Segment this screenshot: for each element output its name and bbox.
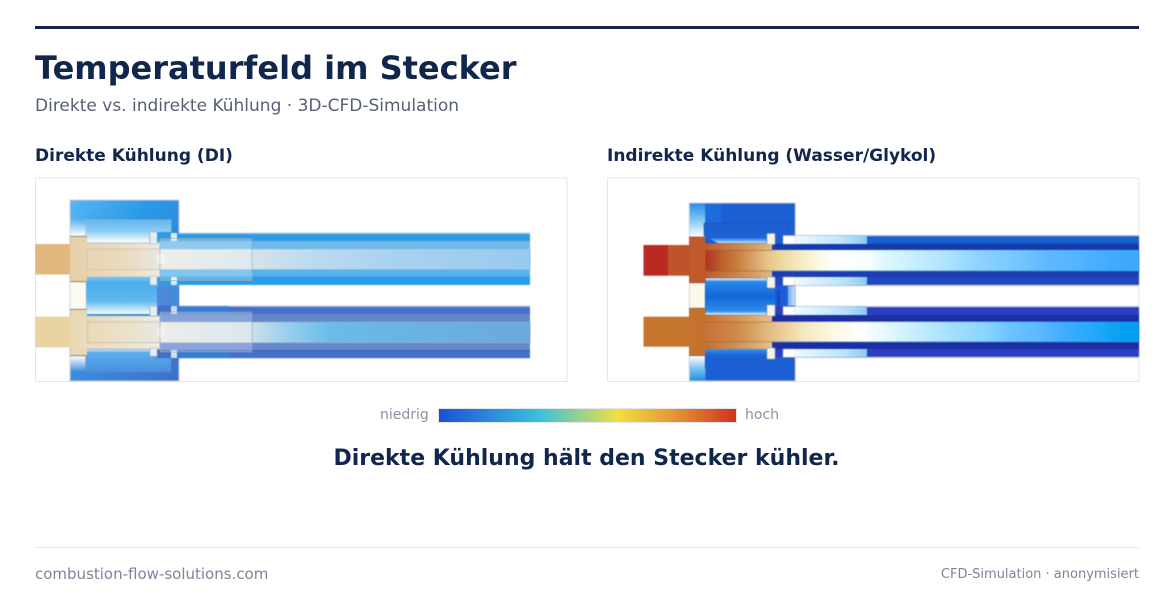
legend label: low: niedrig: [380, 407, 429, 423]
stems and flanges: [35, 236, 160, 356]
footer source: combustion-flow-solutions.com: [35, 565, 268, 583]
conclusion: Direkte Kühlung hält den Stecker kühler.: [333, 446, 840, 471]
conductor cores: [706, 250, 1139, 342]
panel frame: [608, 178, 1139, 382]
legend: [380, 407, 779, 423]
upper cable: [772, 235, 1139, 286]
legend colour ramp: [438, 408, 736, 422]
subtitle: Direkte vs. indirekte Kühlung · 3D-CFD-Simulation: [35, 96, 459, 116]
frosted overlays: [156, 238, 252, 352]
conductor cores: [88, 249, 530, 343]
legend label: high: hoch: [745, 407, 779, 423]
footer rule: [35, 547, 1139, 548]
connector block: [689, 203, 795, 381]
panel: indirect cooling simulation: [607, 178, 1140, 382]
connector block: [70, 200, 179, 381]
contact slots: [150, 232, 177, 358]
footer note: CFD-Simulation · anonymisiert: [941, 567, 1139, 582]
upper cable: [157, 233, 530, 285]
panel: direct cooling simulation: [35, 178, 568, 382]
top rule: [35, 26, 1139, 29]
lower cable: [772, 306, 1139, 358]
title: Temperaturfeld im Stecker: [35, 49, 516, 87]
lower cable: [157, 306, 530, 358]
panel heading: indirect cooling: Indirekte Kühlung (Wasser/Glykol): [607, 146, 936, 166]
inner cavities: [86, 220, 179, 372]
inner cavities: [704, 223, 795, 369]
stems and flanges: [644, 237, 772, 356]
panel frame: [36, 178, 567, 382]
white slots: [767, 234, 867, 359]
panel heading: direct cooling: Direkte Kühlung (DI): [35, 146, 233, 166]
